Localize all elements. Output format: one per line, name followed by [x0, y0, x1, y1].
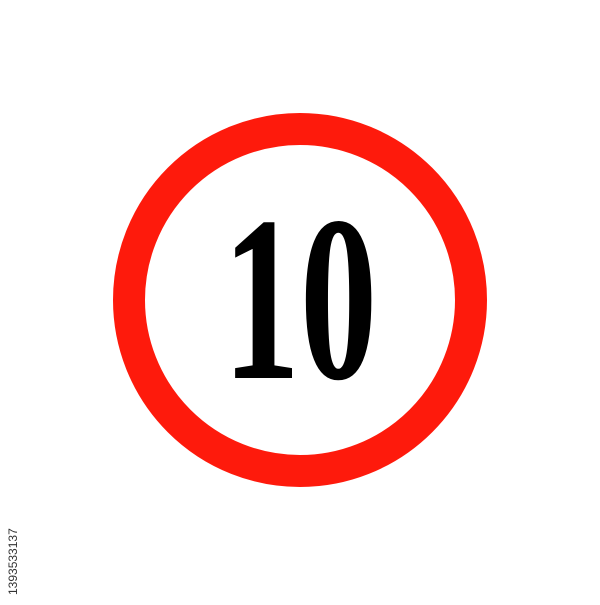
stock id text: 1393533137 [6, 528, 20, 595]
red ring [129, 129, 471, 471]
number 10: 10 [223, 169, 377, 430]
